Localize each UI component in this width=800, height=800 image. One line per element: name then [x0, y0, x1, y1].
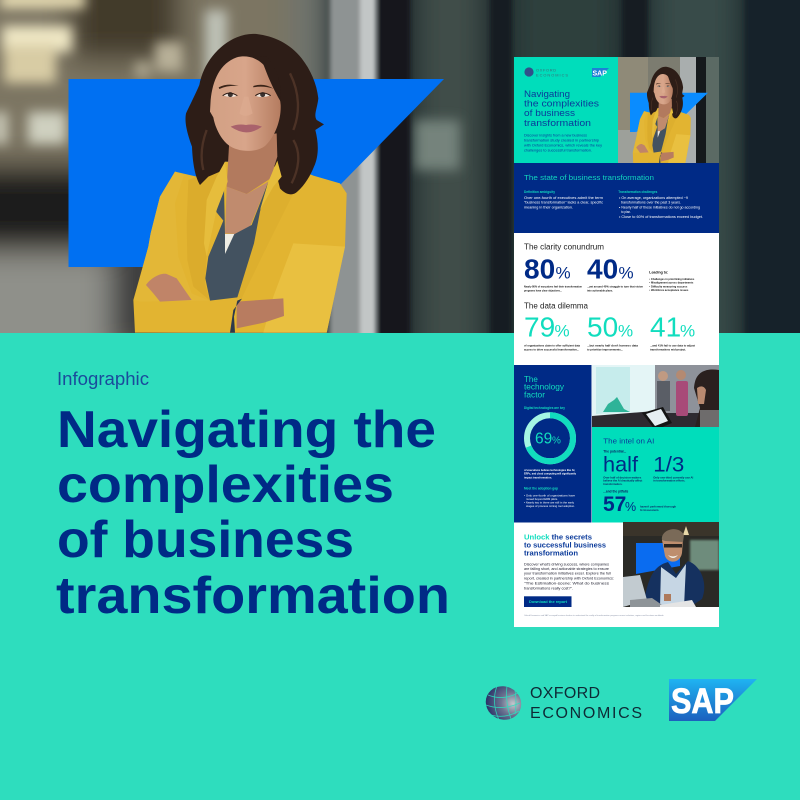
poster panel: clarity conundrum: 80 — [524, 253, 555, 284]
poster panel: intel on AI: believe the AI drastically affect — [603, 479, 642, 483]
poster panel: clarity conundrum: ...yet around 40% struggle to turn that vision — [587, 284, 643, 288]
poster panel: unlock the secrets: Oxford Economics and SAP surveyed business leaders to understand the reality of transformation programs across industries, regions and functions worldwide. — [524, 614, 665, 617]
teal lower panel — [0, 333, 800, 800]
poster page — [514, 57, 719, 627]
poster panel: data dilemma: 79 — [524, 312, 555, 343]
poster panel: state of business transformation: transformations over the past 3 years. — [621, 201, 681, 205]
poster panel: clarity conundrum: • Workforce acceptance issues — [649, 288, 689, 292]
poster panel: header: OXFORD — [536, 67, 556, 72]
poster panel: technology factor: • Only one-fourth of organizations have — [524, 494, 575, 498]
poster panel: header: with Oxford Economics, which reveals the key — [524, 144, 602, 148]
label: Infographic: Infographic — [57, 368, 149, 389]
mini infographic poster — [514, 57, 719, 627]
poster panel: state of business transformation: • Close to 60% of transformations exceed budget. — [619, 215, 703, 219]
poster panel: header: Navigating — [524, 89, 570, 99]
poster panel: technology factor: Digital technologies are key — [524, 406, 565, 410]
poster panel: clarity conundrum: • Difficulty measuring success — [649, 284, 688, 288]
poster panel: clarity conundrum: • Misalignment across departments — [649, 280, 694, 284]
poster panel: intel on AI: The intel on AI — [603, 436, 654, 446]
poster panel: state of business transformation: • On average, organizations attempted ~9 — [619, 196, 688, 200]
poster panel: header: of business — [524, 108, 575, 118]
poster panel: clarity conundrum: Nearly 80% of executives feel their transformation — [524, 284, 582, 288]
donut chart: 69%: 69 — [535, 430, 552, 448]
main title — [56, 401, 450, 625]
donut chart: 69%: % — [552, 436, 561, 446]
logo: Oxford Economics: ECONOMICS — [530, 705, 642, 722]
poster panel: state of business transformation — [514, 163, 719, 233]
poster panel: clarity conundrum: The clarity conundrum — [524, 242, 604, 251]
poster panel: data dilemma — [524, 301, 695, 352]
poster panel: unlock the secrets: are falling short, and actionable strategies to ensure — [524, 567, 609, 571]
poster photo: smiling man at laptop — [623, 522, 719, 607]
main title: complexities — [57, 456, 394, 514]
donut chart: 69% — [527, 415, 573, 461]
poster panel: intel on AI: haven't performed thorough — [640, 504, 676, 508]
poster panel: header: SAP — [592, 70, 607, 78]
poster panel: intel on AI: Only one-third currently use AI — [653, 475, 693, 479]
poster panel: technology factor: of executives believe technologies like AI, — [524, 468, 575, 472]
main title: of business — [57, 511, 354, 569]
button: download the report — [524, 596, 572, 607]
poster panel: clarity conundrum: • Challenges in prioritizing initiatives — [649, 277, 695, 281]
poster panel: data dilemma: of organizations claim to offer sufficient data — [524, 344, 580, 348]
poster panel: intel on AI: The potential... — [603, 449, 626, 453]
poster panel: data dilemma: access to drive successful transformation... — [524, 348, 579, 352]
poster panel: technology factor — [514, 365, 592, 522]
poster panel: intel on AI: 1/3 — [653, 454, 684, 477]
poster panel: header: the complexities — [524, 98, 599, 108]
poster panel: technology factor: • Nearly two in three are still in the early — [524, 501, 574, 505]
poster panel: unlock the secrets: transformations really cost?". — [524, 586, 573, 590]
poster panel: state of business transformation: "business transformation" lacks a clear, specific — [524, 201, 603, 205]
main title: transformation — [56, 567, 450, 625]
poster panel: data dilemma: ...and 41% fail to use data to adjust — [650, 344, 695, 348]
poster panel: header: challenges to successful transformation. — [524, 149, 592, 153]
poster panel: intel on AI: in transformation efforts. — [653, 479, 685, 483]
poster panel: intel on AI: ...and the pitfalls — [603, 490, 629, 494]
poster panel: intel on AI: transformation. — [603, 482, 622, 486]
poster panel: clarity conundrum: Leading to: — [649, 270, 668, 274]
poster panel: technology factor: Meet the adoption gap — [524, 486, 558, 490]
poster panel: state of business transformation: Transformation challenges — [618, 190, 658, 194]
poster panel: data dilemma: % — [618, 322, 633, 341]
portrait of woman in yellow blazer — [133, 34, 347, 333]
poster panel: data dilemma: ...but nearly half don't harness data — [587, 344, 638, 348]
logo: Oxford Economics: OXFORD — [530, 685, 600, 702]
background photo: blurred corridor — [0, 0, 800, 370]
poster panel: header: Discover insights from a new business — [524, 134, 587, 138]
logo: SAP: SAP — [671, 682, 734, 721]
poster photo: woman — [618, 57, 719, 163]
poster panel: data dilemma: transformations mid-project. — [650, 348, 686, 352]
poster panel: clarity conundrum: % — [618, 263, 634, 282]
poster panel: state of business transformation: Definition ambiguity — [524, 190, 555, 194]
poster panel: state of business transformation: The state of business transformation — [524, 173, 654, 182]
poster panel: intel on AI: % — [625, 500, 636, 514]
poster panel: intel on AI: AI risk assessments. — [640, 508, 659, 512]
poster panel: state of business transformation: to plan. — [621, 210, 631, 214]
poster panel: unlock the secrets: "The Estimation-scene: What do business — [524, 581, 609, 585]
poster panel: data dilemma: % — [554, 322, 570, 341]
poster panel: technology factor: ERPs, and cloud computing will significantly — [524, 472, 576, 476]
poster panel: header — [514, 57, 618, 163]
poster panel: data dilemma: to prioritize improvements... — [587, 348, 623, 352]
poster panel: clarity conundrum: % — [556, 263, 571, 282]
poster panel: data dilemma: % — [680, 322, 695, 341]
poster panel: unlock the secrets: Discover what's driving success, where companies — [524, 562, 609, 566]
poster panel: state of business transformation: Over one-fourth of executives admit the term — [524, 196, 603, 200]
poster panel: technology factor: stages of process mining tool adoption. — [526, 504, 575, 508]
poster panel: data dilemma: The data dilemma — [524, 301, 589, 310]
poster panel: unlock the secrets: Unlock the secrets — [524, 532, 592, 541]
poster panel: header: transformation study created in partnership — [524, 139, 599, 143]
poster panel: data dilemma: 41 — [650, 312, 681, 343]
button: download the report: Download the report — [529, 600, 568, 604]
main title: Navigating the — [57, 401, 436, 459]
poster panel: unlock the secrets: report, created in partnership with Oxford Economics: — [524, 576, 614, 580]
poster panel: header: transformation — [524, 118, 591, 128]
poster panel: unlock the secrets: transformation — [524, 548, 578, 557]
blue parallelogram shape — [68, 79, 444, 267]
poster panel: state of business transformation: meaning in their organization. — [524, 205, 573, 209]
poster panel: header: ECONOMICS — [536, 72, 568, 77]
poster panel: technology factor: moved beyond ERM pilots. — [526, 497, 558, 501]
poster panel: clarity conundrum — [524, 242, 695, 293]
poster panel: intel on AI — [592, 427, 719, 522]
poster panel: technology factor: technology — [524, 383, 564, 392]
poster photo: team at data screen — [592, 365, 719, 430]
poster panel: intel on AI: 57 — [603, 493, 626, 516]
poster panel: technology factor: The — [524, 375, 538, 384]
poster panel: clarity conundrum: 40 — [587, 253, 618, 284]
poster panel: clarity conundrum: into actionable plans. — [587, 289, 613, 293]
poster panel: clarity conundrum: programs have clear objectives... — [524, 289, 562, 293]
poster panel: unlock the secrets — [524, 532, 665, 617]
poster panel: intel on AI: Over half of decision-makers — [603, 475, 642, 479]
logo: Oxford Economics — [480, 680, 642, 726]
poster panel: technology factor: impact transformation. — [524, 475, 552, 479]
poster panel: technology factor: factor — [524, 390, 545, 399]
poster panel: state of business transformation: • Nearly half of these initiatives do not go according — [619, 205, 700, 209]
poster panel: data dilemma: 50 — [587, 312, 618, 343]
poster panel: unlock the secrets: to successful business — [524, 540, 606, 549]
poster panel: unlock the secrets: your transformation initiatives excel. Explore the full — [524, 572, 611, 576]
poster panel: intel on AI: half — [603, 454, 638, 477]
